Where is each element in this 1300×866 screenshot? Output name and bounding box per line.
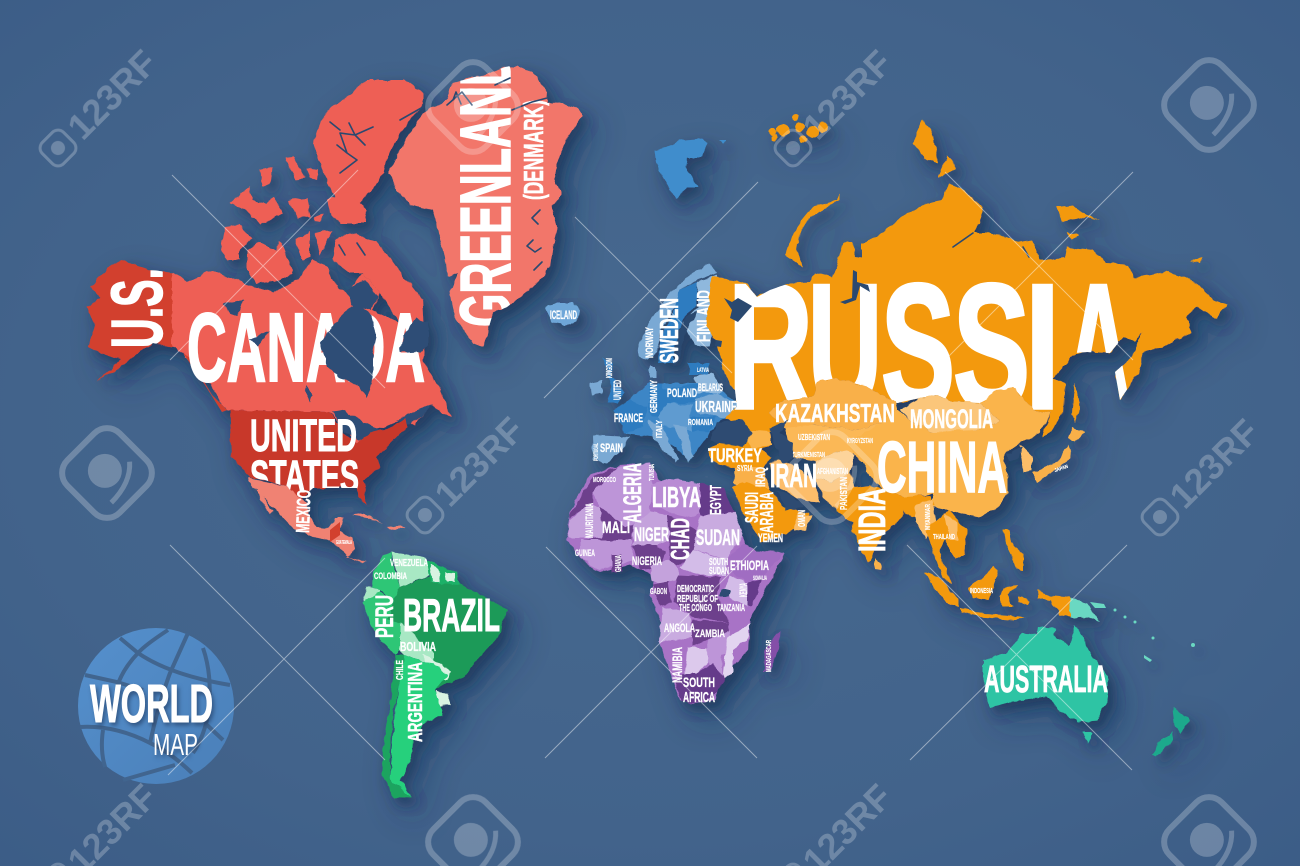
africa: MAURITANIA <box>584 503 596 538</box>
svalbard <box>655 138 726 198</box>
south america: ARGENTINA <box>405 662 427 742</box>
africa <box>567 463 785 706</box>
europe: SWEDEN <box>654 298 684 363</box>
central and east asia: KAZAKHSTAN <box>775 398 895 428</box>
africa: SUDAN <box>709 566 729 577</box>
greenland <box>388 55 583 347</box>
africa: ZAMBIA <box>695 628 725 640</box>
europe: BELARUS <box>698 382 723 394</box>
africa: MALI <box>602 518 630 537</box>
white sea and lakes <box>715 270 870 347</box>
watermark icon middle centre right <box>780 425 884 529</box>
africa: SUDAN <box>696 525 740 550</box>
central and east asia: SAUDI <box>742 492 762 523</box>
russia: I <box>1025 247 1060 446</box>
central and east asia: OMAN <box>797 510 808 527</box>
watermark lines <box>168 170 1133 775</box>
africa: NIGERIA <box>632 554 662 568</box>
africa: ETHIOPIA <box>730 557 769 573</box>
africa: SOUTH <box>709 557 728 568</box>
watermark icon bottom centre <box>421 790 525 866</box>
africa: KENYA <box>738 583 750 597</box>
south america <box>363 552 508 798</box>
watermark logo middle centre: 123RF <box>426 409 532 514</box>
central and east asia: INDONESIA <box>970 588 993 595</box>
europe <box>590 263 747 463</box>
africa: MOROCCO <box>593 477 616 484</box>
africa: DEMOCRATIC <box>677 584 714 595</box>
watermark icon top right <box>1157 53 1261 157</box>
africa: AFRICA <box>683 689 715 706</box>
south america: COLOMBIA <box>374 571 407 581</box>
africa: GHANA <box>614 555 623 572</box>
watermark logo top centre <box>768 42 900 173</box>
central and east asia: CHINA <box>877 428 1007 508</box>
europe: GERMANY <box>649 380 660 413</box>
africa: ANGOLA <box>664 621 695 635</box>
iceland: ICELAND <box>550 308 577 322</box>
united states <box>230 410 407 505</box>
title: world map <box>90 674 213 762</box>
watermark icon top centre <box>421 55 525 159</box>
africa: REPUBLIC OF <box>677 594 718 605</box>
mexico and central america: GUATEMALA <box>336 540 352 546</box>
europe: FINLAND <box>694 290 714 342</box>
africa: LIBYA <box>652 482 701 514</box>
watermark logo top left: 123RF <box>59 42 165 147</box>
australia and oceania <box>983 598 1195 757</box>
mexico and central america <box>248 478 405 563</box>
globe badge <box>78 628 234 784</box>
europe: PORTUGAL <box>594 443 600 461</box>
europe: NORWAY <box>644 327 656 358</box>
europe: SPAIN <box>600 441 623 455</box>
north america: canada, greenland, us, mexico <box>87 55 583 563</box>
watermark logo middle centre <box>400 409 532 540</box>
central and east asia: MONGOLIA <box>910 404 993 434</box>
central and east asia: SYRIA <box>737 464 753 473</box>
central and east asia: UZBEKISTAN <box>798 433 830 442</box>
russia: A <box>1065 247 1132 446</box>
russian arctic islands <box>769 115 1202 267</box>
central and east asia: THAILAND <box>933 534 955 541</box>
central and east asia: YEMEN <box>758 531 783 545</box>
russia <box>706 115 1227 452</box>
title: world map: WORLD <box>90 674 213 734</box>
russia: U <box>808 247 882 446</box>
africa: GABON <box>650 587 667 596</box>
south america: PERU <box>371 595 399 638</box>
russia: S <box>881 247 955 446</box>
alaska <box>87 260 178 382</box>
africa: MADAGASCAR <box>766 640 773 672</box>
central and east asia: ARABIA <box>757 492 777 533</box>
united states: UNITED <box>250 410 357 461</box>
central and east asia: INDIA <box>852 488 894 552</box>
africa: THE CONGO <box>679 603 712 614</box>
united states: STATES <box>250 451 359 502</box>
africa: SOUTH <box>683 674 715 690</box>
central and east asia <box>707 378 1085 620</box>
africa: TANZANIA <box>717 603 745 614</box>
south america: CHILE <box>395 660 406 680</box>
europe: ROMANIA <box>688 418 713 427</box>
central and east asia: IRAQ <box>752 467 768 487</box>
europe: UKRAINE <box>695 399 737 416</box>
africa: NIGER <box>634 525 669 546</box>
canada mainland <box>172 260 452 443</box>
central and east asia: KYRGYZSTAN <box>847 438 873 445</box>
mexico and central america: MEXICO <box>293 489 315 533</box>
greenland: (DENMARK) <box>518 100 549 200</box>
watermark logo top left <box>33 42 165 173</box>
africa: EGYPT <box>708 485 725 515</box>
europe: FRANCE <box>614 411 643 425</box>
alaska: U.S. <box>98 268 178 348</box>
central and east asia: AFGHANISTAN <box>817 467 848 476</box>
europe: POLAND <box>667 386 697 400</box>
watermark icon bottom right <box>1157 790 1261 866</box>
russia: R <box>728 247 813 446</box>
africa: CHAD <box>665 518 695 560</box>
central and east asia: TURKMENISTAN <box>792 452 825 459</box>
africa: NAMIBIA <box>669 647 685 683</box>
africa: SOMALIA <box>753 576 767 582</box>
hudson bay and lakes <box>223 280 432 440</box>
africa: ALGERIA <box>619 463 647 523</box>
south america: VENEZUELA <box>390 558 428 569</box>
watermark logo top centre: 123RF <box>794 42 900 147</box>
inland seas <box>710 420 1023 510</box>
europe: LATVIA <box>697 368 709 374</box>
central and east asia: PAKISTAN <box>839 477 850 510</box>
pacific islands <box>1090 602 1195 662</box>
central and east asia: TURKEY <box>708 446 762 467</box>
australia and oceania: AUSTRALIA <box>984 659 1108 701</box>
africa: TUNISIA <box>649 464 656 481</box>
central and east asia: IRAN <box>770 457 817 494</box>
watermark logo middle right <box>1135 411 1267 542</box>
title: world map: MAP <box>153 727 198 762</box>
south america: BOLIVIA <box>400 639 436 654</box>
canada mainland: CANADA <box>187 293 425 402</box>
russia: S <box>953 247 1030 446</box>
canada arctic islands <box>220 80 423 323</box>
map: continents <box>87 55 1227 798</box>
watermark logo middle right: 123RF <box>1161 411 1267 516</box>
central and east asia: MYANMAR <box>925 504 932 530</box>
south america: BRAZIL <box>403 589 500 641</box>
watermark icon middle left <box>55 421 159 525</box>
europe: ITALY <box>655 419 664 438</box>
central and east asia: JAPAN <box>1054 464 1069 474</box>
africa: GUINEA <box>575 548 595 558</box>
europe: UNITED <box>612 380 624 400</box>
europe: KINGDOM <box>605 358 614 378</box>
iceland <box>545 303 580 326</box>
